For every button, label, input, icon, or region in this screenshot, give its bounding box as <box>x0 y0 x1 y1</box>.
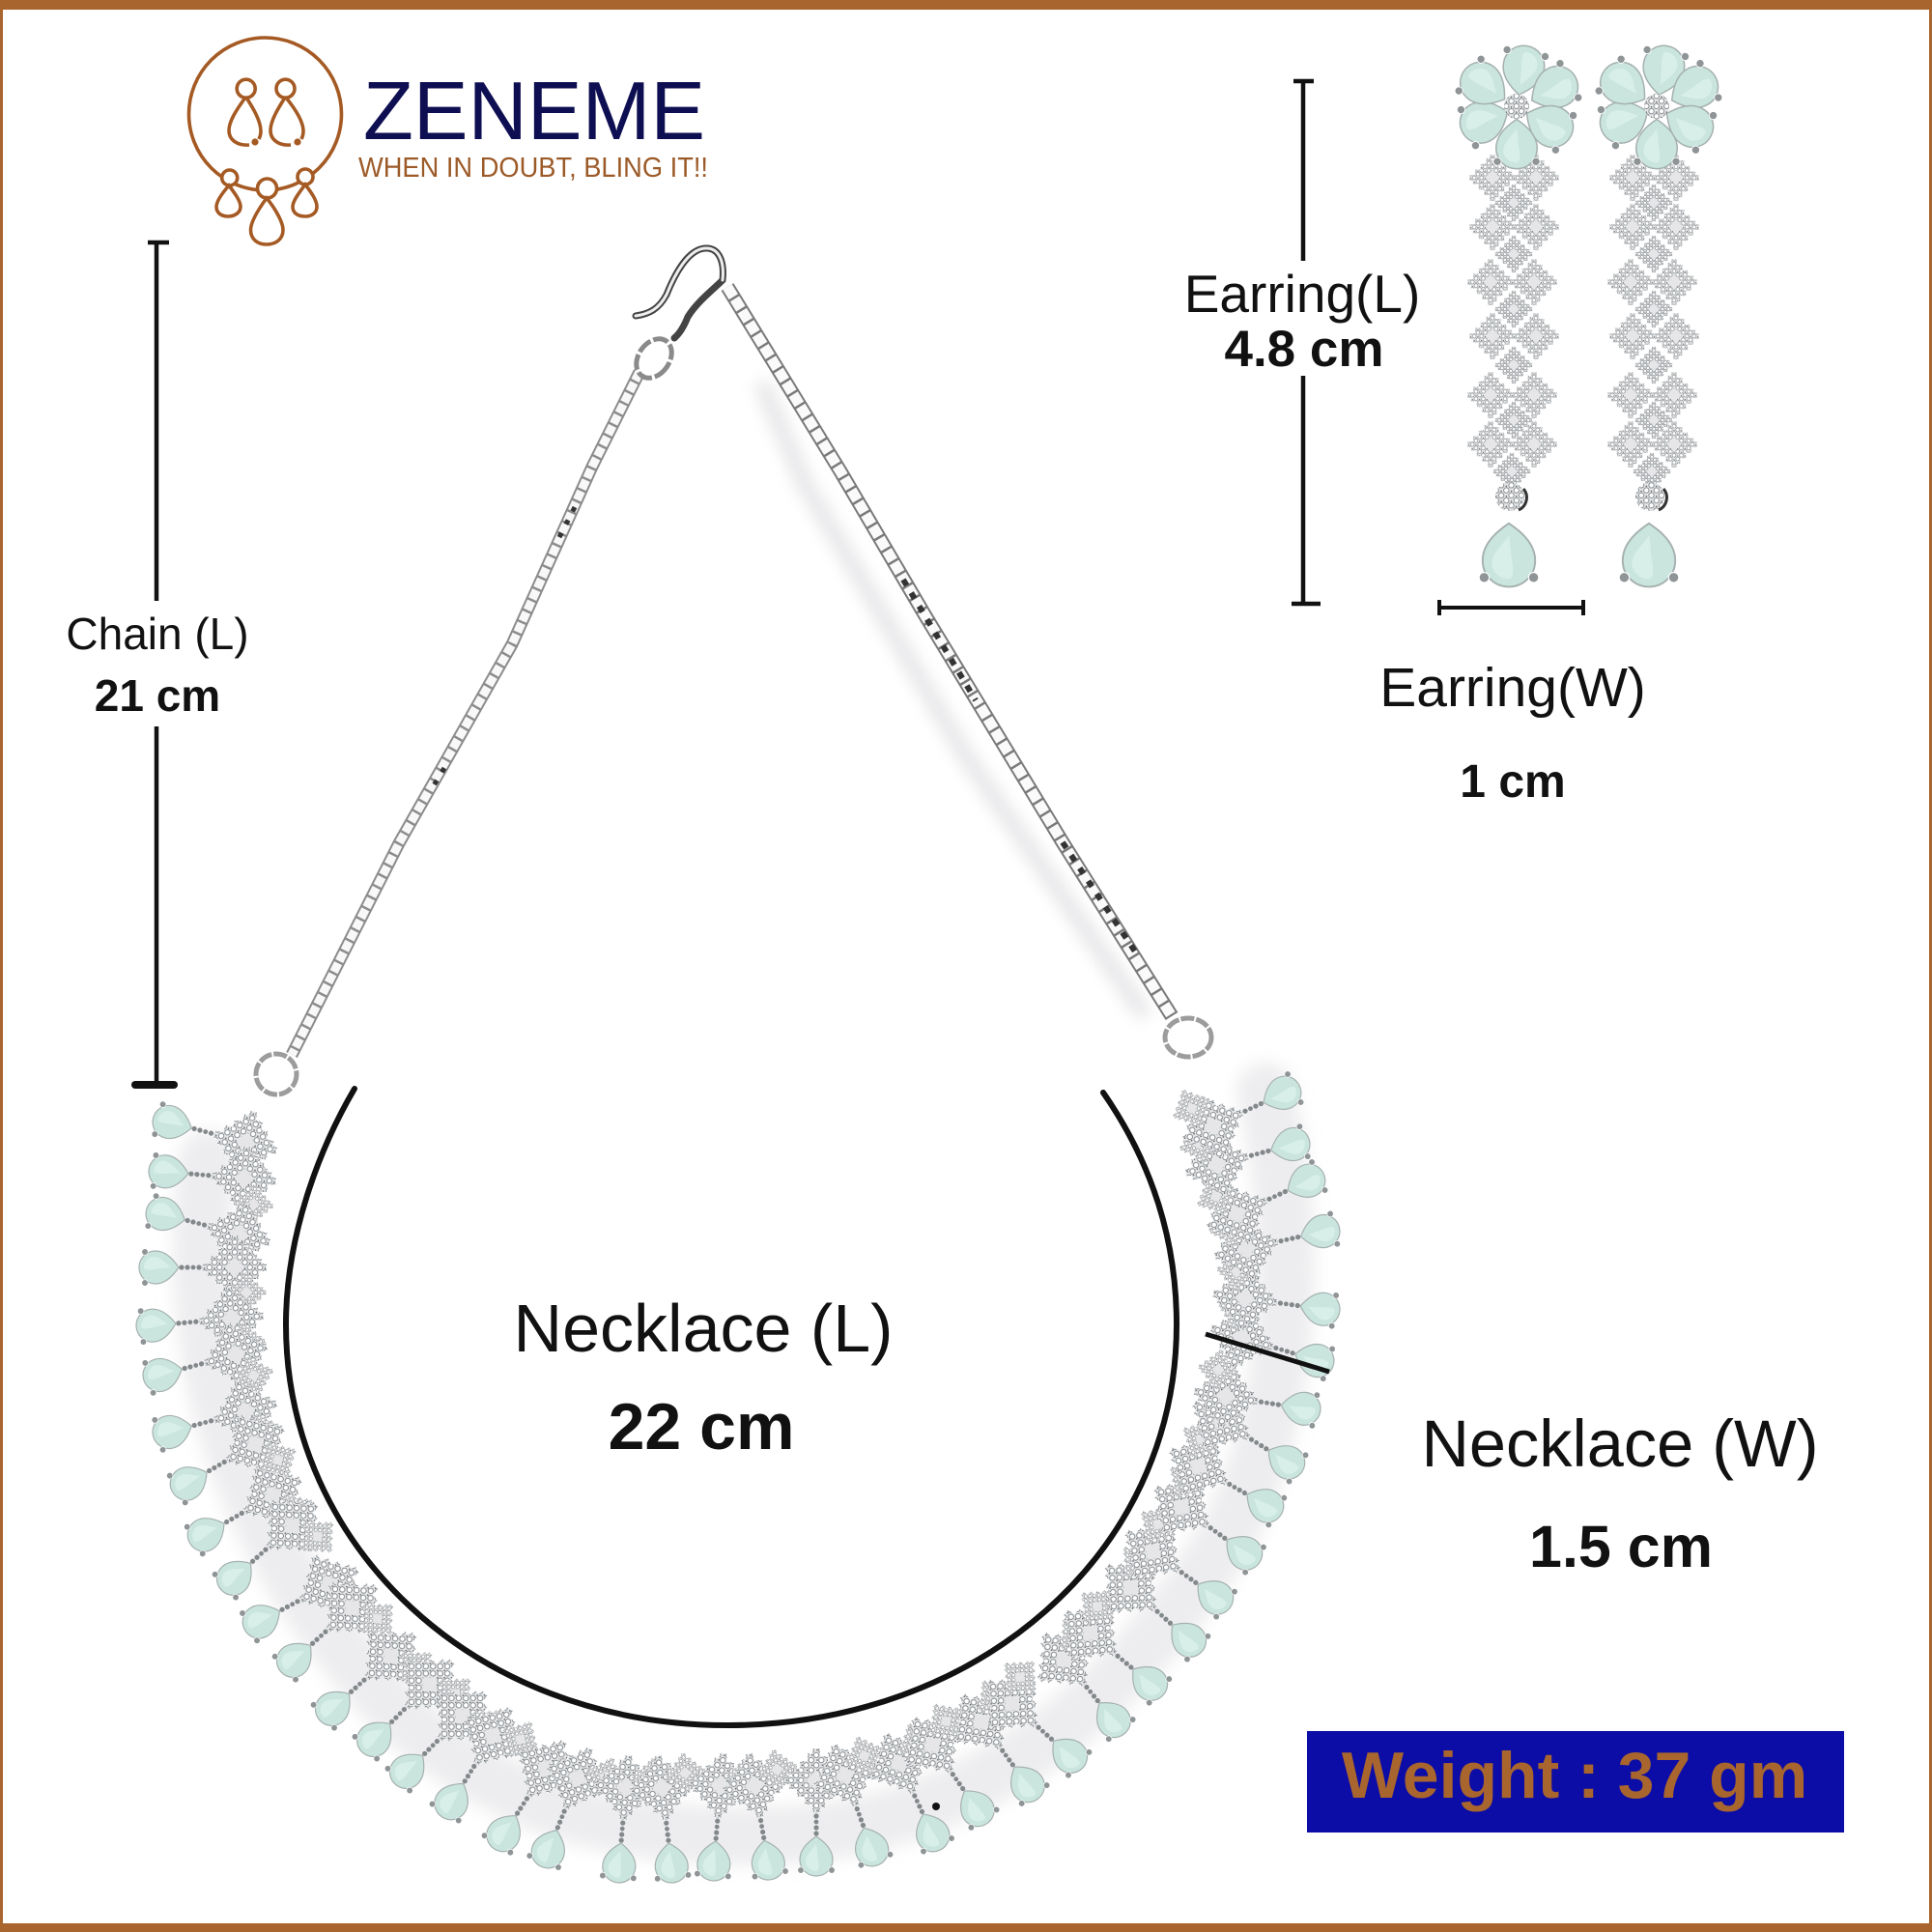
necklace width label: 1.5 cm <box>1529 1514 1713 1579</box>
hook clasp <box>636 248 723 338</box>
right chain <box>727 287 1172 1016</box>
earring width label: Earring(W) <box>1379 657 1646 719</box>
left chain <box>292 372 639 1055</box>
necklace length label <box>514 1291 893 1463</box>
logo emblem <box>189 38 342 244</box>
earring width dimension line <box>1439 600 1583 615</box>
chain length label: Chain (L) <box>66 609 249 659</box>
necklace gems and lattice <box>133 1045 1347 1887</box>
weight badge <box>1307 1731 1844 1833</box>
left end ring <box>256 1054 297 1094</box>
chain length label: 21 cm <box>95 670 220 721</box>
earring length label: 4.8 cm <box>1224 321 1384 378</box>
earring left <box>1451 42 1586 586</box>
necklace length label: Necklace (L) <box>514 1291 893 1366</box>
earring width label: 1 cm <box>1460 756 1566 808</box>
earring length label: Earring(L) <box>1184 264 1420 324</box>
earring length dimension line <box>1292 81 1321 604</box>
necklace width marker line <box>1206 1334 1329 1372</box>
tagline: WHEN IN DOUBT, BLING IT!! <box>358 153 708 184</box>
necklace with chain <box>133 248 1347 1887</box>
necklace length label: 22 cm <box>609 1390 794 1463</box>
earring width label <box>1379 657 1646 808</box>
earring pair <box>1451 42 1726 586</box>
clasp ring <box>629 332 679 384</box>
necklace width label: Necklace (W) <box>1421 1406 1819 1481</box>
brand logo <box>189 38 708 244</box>
necklace length curve <box>286 1089 1177 1725</box>
chain shadows <box>202 386 1286 1835</box>
earring right <box>1591 42 1726 586</box>
weight badge: Weight : 37 gm <box>1342 1739 1807 1812</box>
earring length label <box>1184 264 1420 378</box>
right end ring <box>1165 1018 1211 1057</box>
brand name: ZENEME <box>363 66 705 157</box>
chain length label <box>66 609 249 721</box>
chain length dimension line <box>135 242 174 1085</box>
necklace width label <box>1421 1406 1819 1579</box>
